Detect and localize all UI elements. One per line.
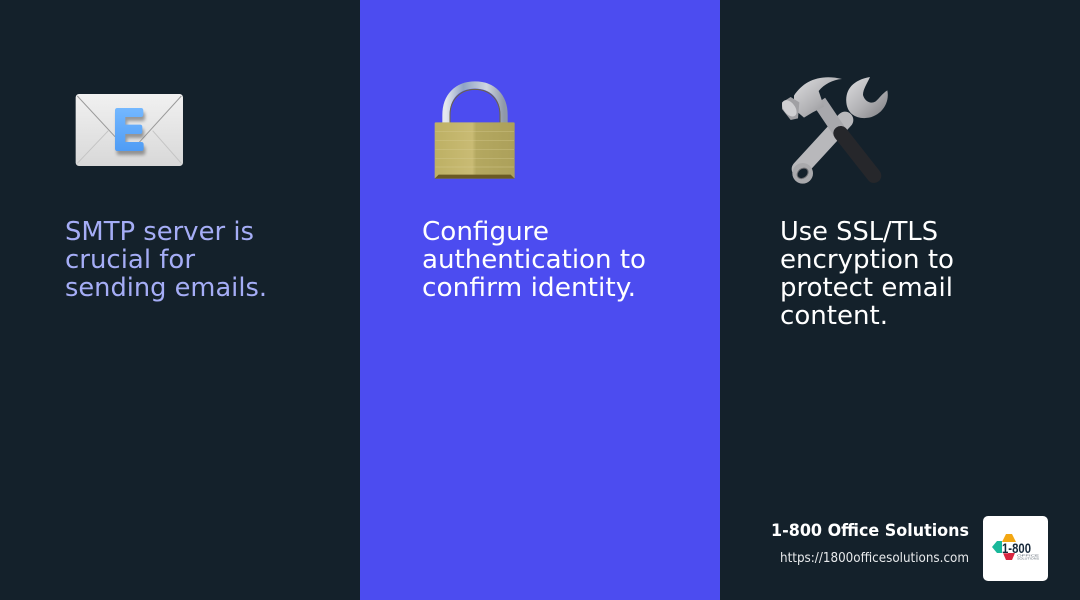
logo mark: OFFICE: [1017, 554, 1039, 558]
icon: padlock: [435, 85, 515, 179]
logo mark: SOLUTIONS: [1017, 556, 1039, 560]
logo mark: 1-800: [1002, 541, 1031, 556]
icon: envelope with letter E: [76, 94, 183, 166]
text: configure authentication: Configure: [422, 217, 549, 247]
text: use SSL/TLS: content.: [780, 301, 888, 331]
text: SMTP server is crucial: sending emails.: [65, 273, 267, 303]
brand name: 1-800 Office Solutions: [771, 521, 969, 541]
logo card: [983, 516, 1048, 581]
logo mark: [992, 534, 1039, 560]
brand footer: [771, 516, 1048, 581]
text: configure authentication: confirm identity.: [422, 273, 636, 303]
panel: SMTP server: [0, 0, 360, 600]
panel: authentication: [360, 0, 720, 600]
icon: hammer and wrench: [779, 77, 888, 184]
text: use SSL/TLS: Use SSL/TLS: [780, 217, 938, 247]
text: use SSL/TLS: encryption to: [780, 245, 954, 275]
text: SMTP server is crucial: crucial for: [65, 245, 195, 275]
panel: encryption: [720, 0, 1080, 600]
text: use SSL/TLS: protect email: [780, 273, 953, 303]
text: SMTP server is crucial: SMTP server is: [65, 217, 254, 247]
text: configure authentication: authentication to: [422, 245, 646, 275]
website url: https://1800officesolutions.com: [780, 551, 969, 566]
